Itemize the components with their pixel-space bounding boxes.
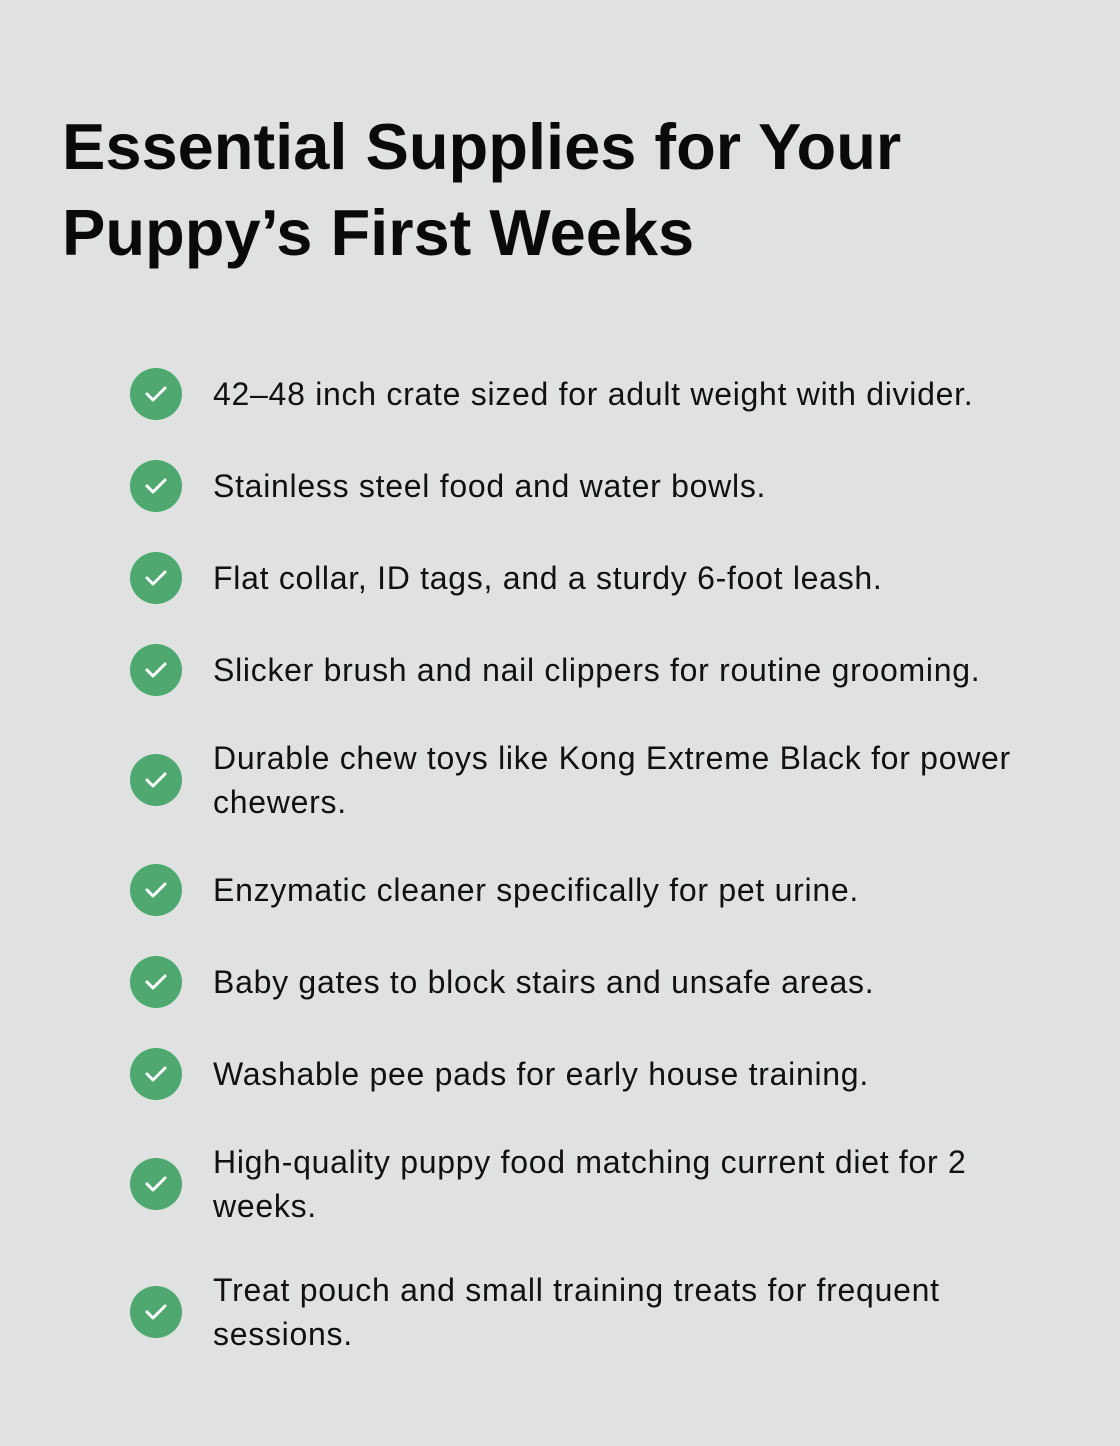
item 6	[130, 864, 859, 916]
item 1: 42–48 inch crate sized for adult weight with divider.	[213, 376, 973, 412]
item 8: Washable pee pads for early house training.	[213, 1056, 869, 1092]
item 4: Slicker brush and nail clippers for routine grooming.	[213, 652, 980, 688]
item 2: Stainless steel food and water bowls.	[213, 468, 766, 504]
item 7: Baby gates to block stairs and unsafe areas.	[213, 964, 874, 1000]
item 6: Enzymatic cleaner specifically for pet urine.	[213, 872, 859, 908]
item 2	[130, 460, 766, 512]
item 8	[130, 1048, 869, 1100]
title: Puppy’s First Weeks	[62, 196, 694, 269]
item 3	[130, 552, 883, 604]
title: Essential Supplies for Your	[62, 110, 901, 183]
title	[62, 110, 901, 269]
item 5: Durable chew toys like Kong Extreme Black for power chewers.	[213, 740, 1011, 820]
item 10: Treat pouch and small training treats for frequent sessions.	[213, 1272, 940, 1352]
item 4	[130, 644, 980, 696]
item 9: High-quality puppy food matching current diet for 2 weeks.	[213, 1144, 967, 1224]
item 7	[130, 956, 874, 1008]
item 1	[130, 368, 973, 420]
item 3: Flat collar, ID tags, and a sturdy 6-foot leash.	[213, 560, 883, 596]
